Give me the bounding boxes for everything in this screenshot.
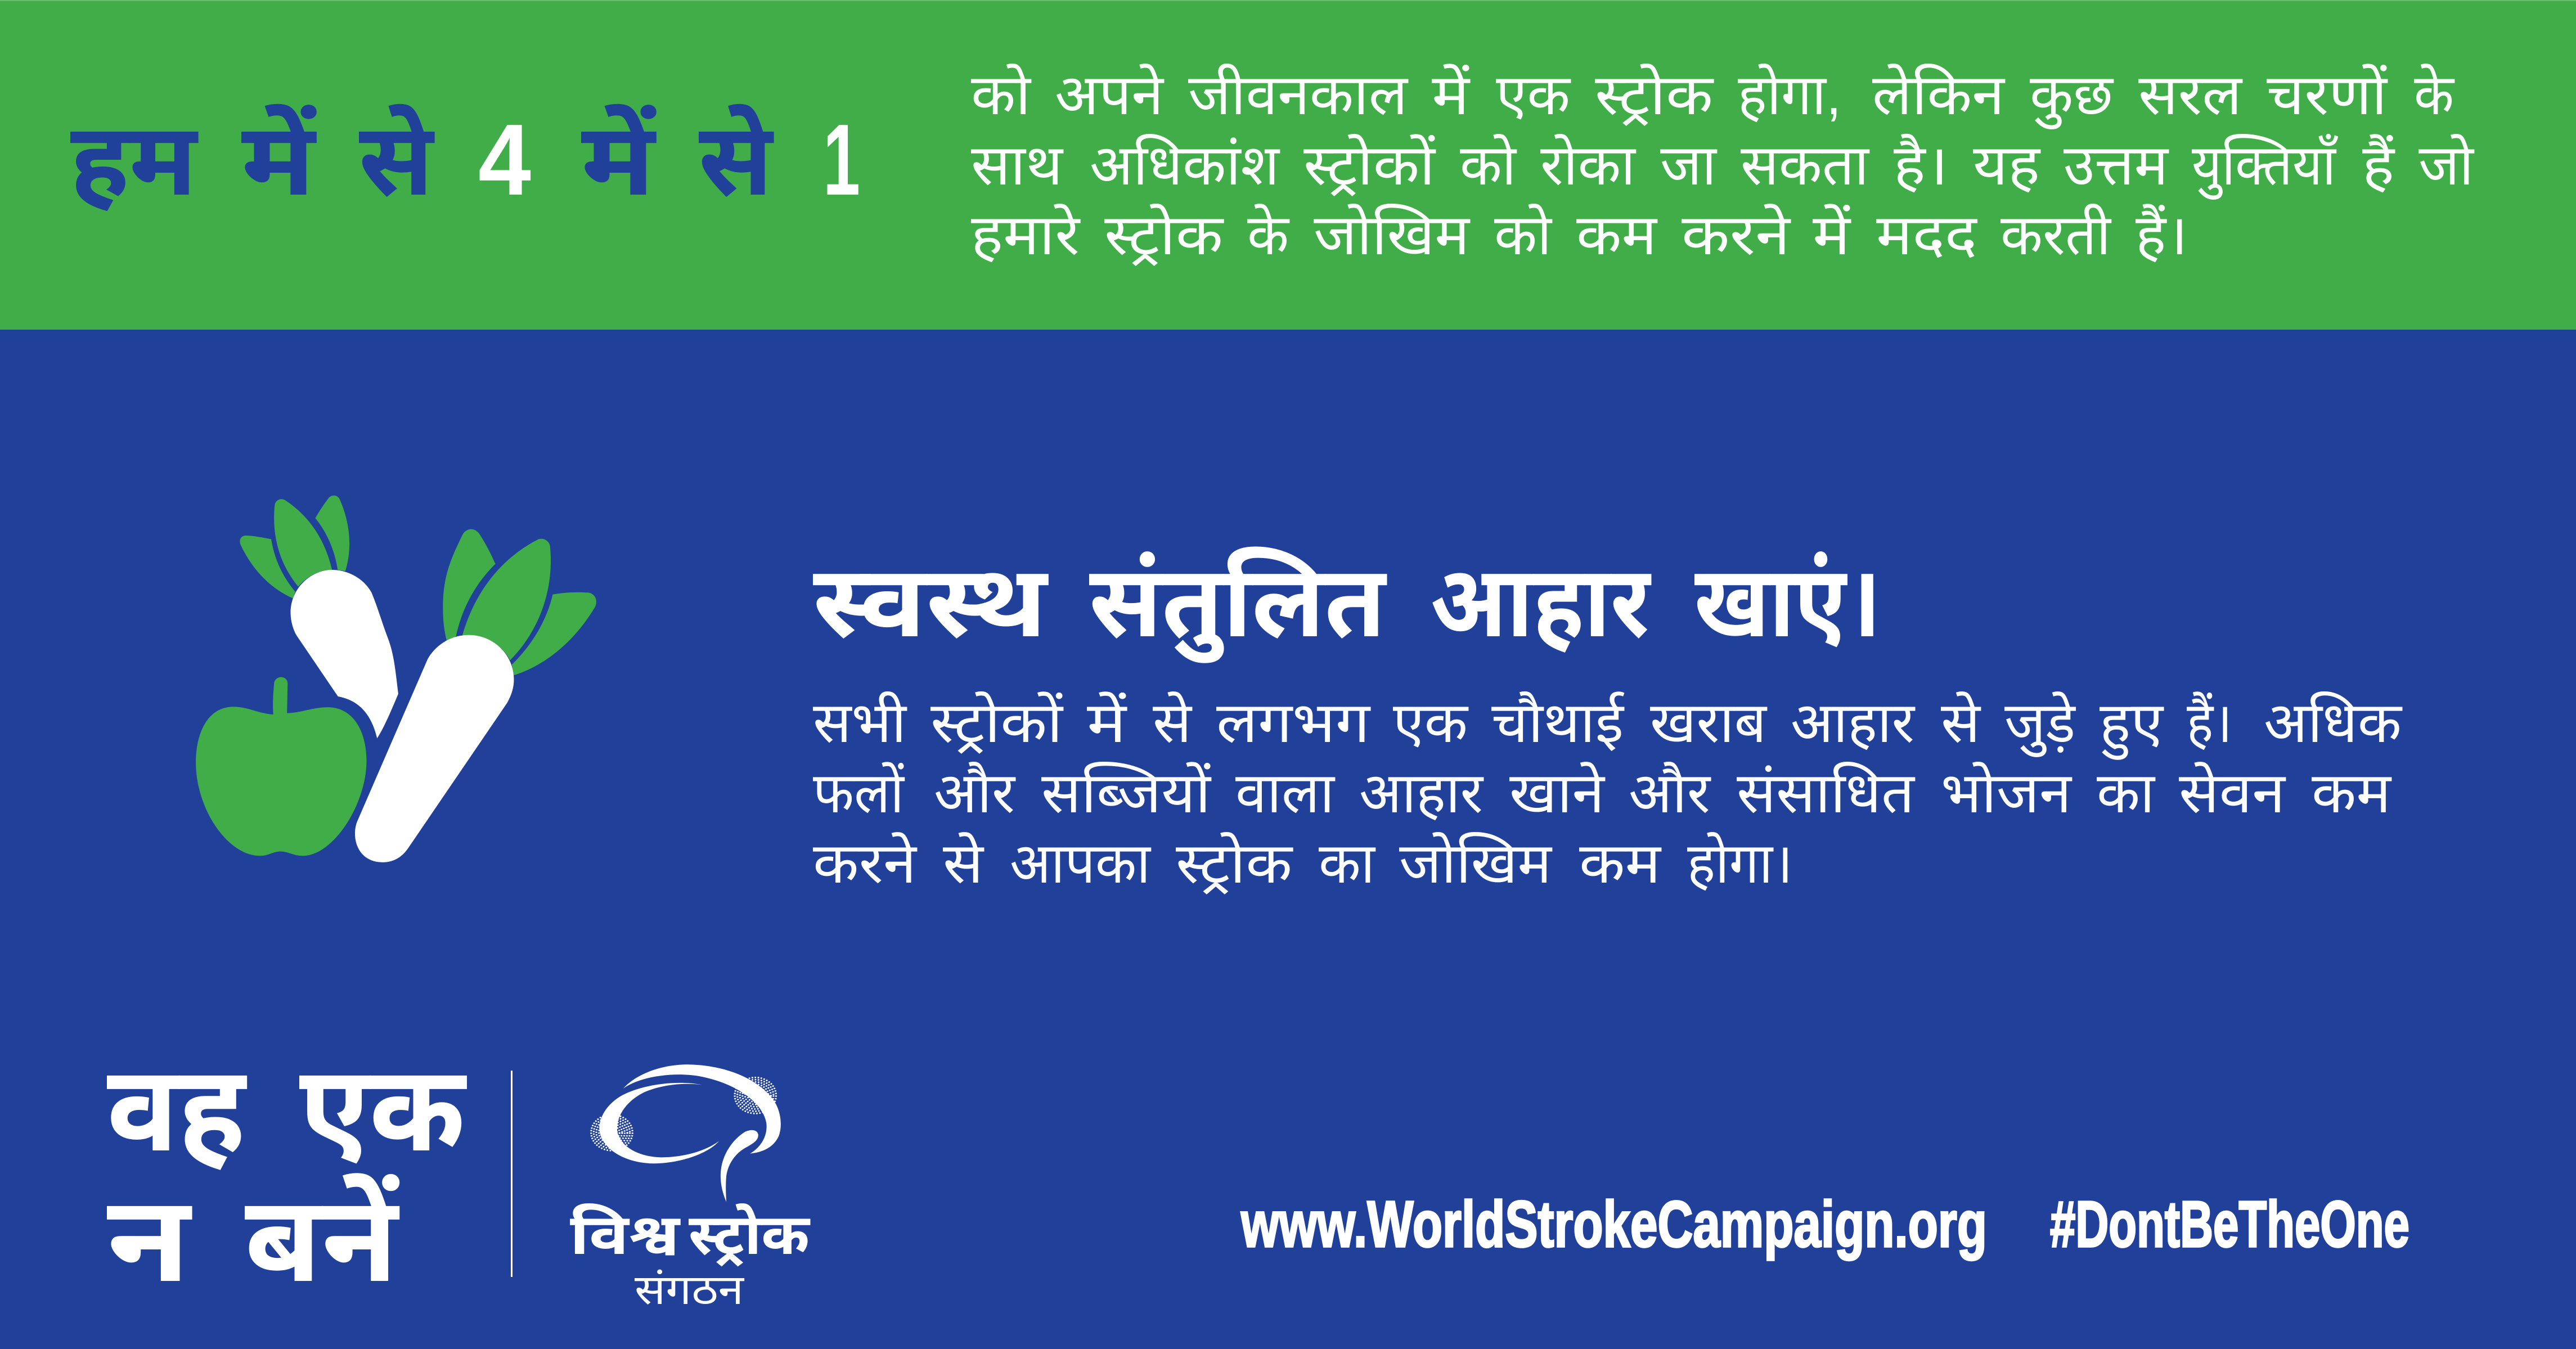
slogan: don't be the one: बनें [245, 1172, 399, 1307]
header paragraph: साथ [971, 134, 1064, 197]
slogan: don't be the one: न [107, 1172, 192, 1307]
header paragraph: एक [1496, 64, 1571, 127]
body text: से [1153, 691, 1192, 754]
body text: का [1319, 832, 1376, 895]
body text: संसाधित [1737, 762, 1916, 825]
heading: eat a healthy balanced diet: संतुलित [1089, 546, 1388, 663]
header paragraph: उत्तम [2064, 134, 2169, 197]
heading: eat a healthy balanced diet: आहार [1430, 546, 1652, 658]
header paragraph: रोका [1540, 134, 1637, 197]
header stat: 1 in 4 of us: हम [70, 104, 199, 217]
body text: का [2097, 762, 2156, 825]
icon: apple [196, 677, 366, 856]
panel: green header band [0, 0, 2576, 330]
header paragraph: है। [1894, 134, 1948, 197]
logo: World Stroke Organization [570, 1064, 811, 1313]
heading: eat a healthy balanced diet [813, 546, 1881, 663]
body text: सभी [813, 691, 907, 754]
body text: भोजन [1941, 762, 2073, 825]
header paragraph: के [1247, 204, 1290, 267]
header paragraph: युक्तियाँ [2192, 134, 2339, 200]
hashtag: #DontBeTheOne [2050, 1188, 2409, 1261]
header paragraph: स्ट्रोक [1595, 64, 1714, 127]
logo text: World Stroke [570, 1203, 811, 1267]
header paragraph: जीवनकाल [1188, 64, 1409, 127]
body text: चौथाई [1491, 691, 1625, 754]
header paragraph: यह [1973, 134, 2041, 197]
header stat: 1 in 4 of us: में [581, 104, 657, 217]
header paragraph: को [971, 64, 1032, 127]
body text: और [934, 762, 1016, 825]
icon: small carrot leaves [240, 496, 349, 599]
website url: www.WorldStrokeCampaign.org [1240, 1188, 1987, 1261]
body text: आहार [1359, 762, 1484, 825]
body text: हैं। [2187, 691, 2232, 754]
header paragraph: को [1460, 134, 1517, 197]
slogan: don't be the one: एक [299, 1042, 467, 1176]
header paragraph: होगा, [1738, 64, 1841, 127]
body text [813, 691, 2403, 895]
logo text: World Stroke: स्ट्रोक [689, 1203, 811, 1267]
body text: होगा। [1687, 832, 1793, 895]
body text: से [1941, 691, 1981, 754]
header stat: 1 in 4 of us: में [241, 104, 317, 217]
body text: स्ट्रोक [1176, 832, 1293, 895]
body text: एक [1393, 691, 1469, 754]
header paragraph: के [2414, 64, 2455, 127]
header paragraph: हमारे [971, 204, 1081, 267]
header stat: 1 in 4 of us: से [359, 104, 435, 217]
icon: small carrot [291, 570, 398, 738]
body text: लगभग [1216, 691, 1371, 754]
slogan: don't be the one: वह [107, 1042, 248, 1176]
header paragraph: में [1432, 64, 1471, 127]
header paragraph: सकता [1741, 134, 1870, 197]
header paragraph: जोखिम [1314, 204, 1471, 267]
header paragraph: कम [1576, 204, 1658, 267]
header paragraph: जो [2418, 134, 2475, 197]
body text: जोखिम [1399, 832, 1553, 895]
body text: फलों [813, 762, 905, 825]
body text: और [1629, 762, 1711, 825]
header paragraph: कुछ [2030, 64, 2114, 130]
icon: large carrot leaves [443, 529, 596, 675]
header paragraph: में [1813, 204, 1851, 267]
header stat: 1 in 4 of us: 4 [478, 104, 531, 217]
body text: अधिक [2264, 691, 2403, 754]
body text: जुड़े [2004, 691, 2076, 758]
body text: खाने [1509, 762, 1606, 825]
logo text: Organization: संगठन [635, 1266, 745, 1313]
header paragraph: स्ट्रोक [1104, 204, 1224, 267]
header paragraph: जा [1660, 134, 1718, 197]
heading: eat a healthy balanced diet: स्वस्थ [813, 546, 1049, 658]
header paragraph: को [1494, 204, 1553, 267]
body text: हुए [2100, 691, 2164, 760]
body text: सब्जियों [1041, 762, 1212, 825]
body text: वाला [1235, 762, 1336, 825]
header paragraph: अधिकांश [1090, 134, 1280, 197]
header stat: 1 in 4 of us: 1 [823, 104, 860, 217]
body text: कम [2312, 762, 2392, 825]
divider line [511, 1071, 512, 1277]
header paragraph: हैं [2362, 134, 2395, 197]
header stat: 1 in 4 of us [70, 104, 860, 217]
heading: eat a healthy balanced diet: खाएं। [1694, 546, 1881, 658]
body text: खराब [1650, 691, 1768, 754]
header paragraph: हैं। [2136, 204, 2188, 267]
body text: में [1087, 691, 1128, 754]
icon: apple and carrots [196, 496, 596, 862]
header paragraph: सरल [2138, 64, 2243, 127]
header paragraph [971, 64, 2475, 267]
header paragraph: स्ट्रोकों [1303, 134, 1436, 197]
header paragraph: करती [2000, 204, 2112, 267]
header stat: 1 in 4 of us: से [699, 104, 774, 217]
body text: सेवन [2179, 762, 2286, 825]
body text: से [943, 832, 984, 895]
logo: brain mark [591, 1064, 781, 1202]
icon: large carrot [355, 635, 514, 862]
body text: आपका [1010, 832, 1152, 895]
body text: स्ट्रोकों [930, 691, 1064, 754]
slogan: don't be the one [107, 1042, 467, 1307]
logo text: World Stroke: विश्व [570, 1203, 681, 1266]
header paragraph: मदद [1876, 204, 1978, 267]
body text: आहार [1791, 691, 1916, 754]
header paragraph: लेकिन [1872, 64, 2006, 127]
header paragraph: चरणों [2267, 64, 2388, 127]
body text: करने [813, 832, 918, 895]
body text: कम [1579, 832, 1662, 895]
header paragraph: करने [1682, 204, 1791, 267]
header paragraph: अपने [1055, 64, 1165, 127]
